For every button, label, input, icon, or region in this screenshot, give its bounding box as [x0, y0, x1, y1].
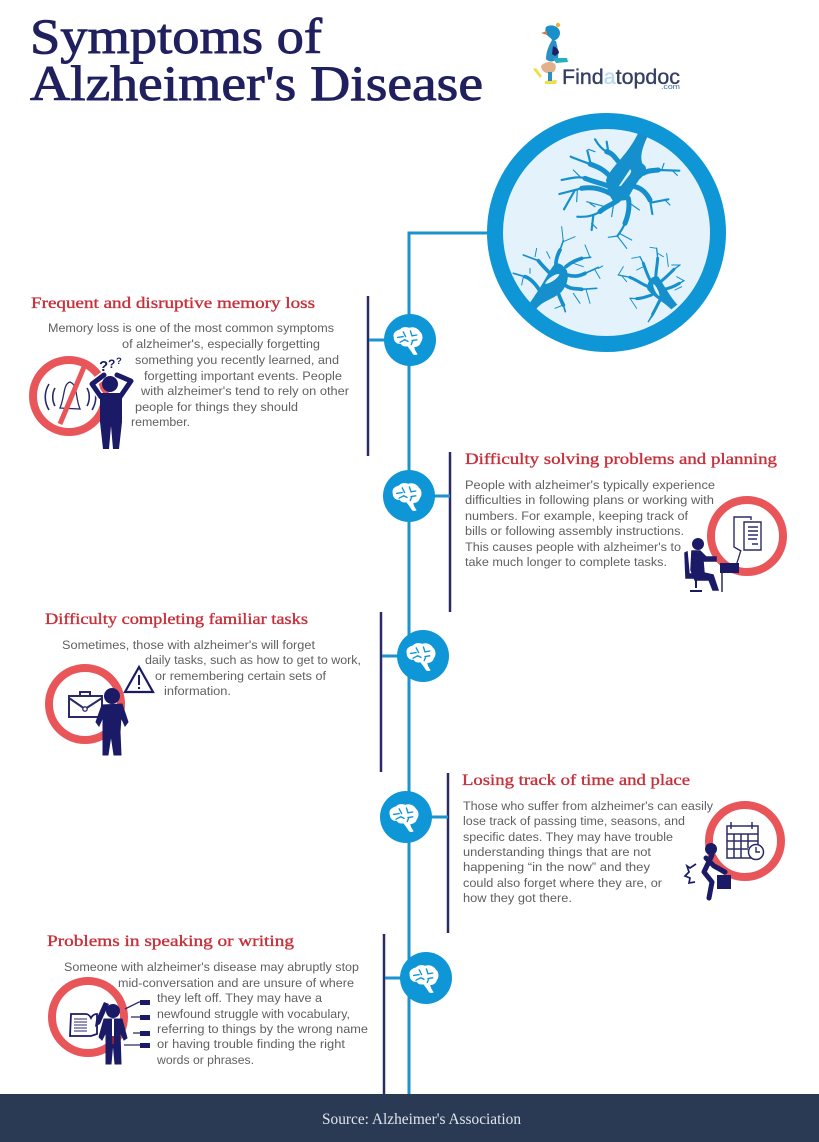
icon: confused person with muted bell: ?: [108, 357, 115, 371]
footer: source bar: [0, 1094, 819, 1142]
body text: how they got there.: [463, 891, 572, 905]
body text: Memory loss is one of the most common symptoms: [48, 321, 334, 335]
body text: forgetting important events. People: [144, 369, 342, 383]
icon: confused person with muted bell: ?: [99, 358, 108, 375]
body text: numbers. For example, keeping track of: [465, 509, 689, 523]
body text: bills or following assembly instructions.: [465, 524, 684, 538]
neuron 3: [618, 247, 684, 322]
body text: referring to things by the wrong name: [157, 1022, 368, 1036]
body text: [62, 638, 361, 698]
heading: Problems in speaking or writing: [47, 932, 294, 950]
body text: specific dates. They may have trouble: [463, 830, 673, 844]
section 4: time and place: [380, 771, 781, 933]
connector: [385, 976, 408, 980]
body text: take much longer to complete tasks.: [465, 555, 667, 569]
section 5: speaking or writing: [47, 932, 452, 1094]
section 1: memory loss: [31, 294, 436, 456]
heading: Difficulty solving problems and planning: [465, 450, 777, 468]
body text: people for things they should: [135, 400, 298, 414]
connector: [382, 654, 405, 658]
icon: brain badge: [380, 791, 432, 843]
body text: Those who suffer from alzheimer's can easily: [463, 799, 714, 813]
neuron circle illustration: [495, 121, 718, 344]
section rule: [447, 773, 449, 933]
body text: understanding things that are not: [463, 845, 652, 859]
timeline spine: [409, 233, 487, 1094]
body text: or remembering certain sets of: [155, 669, 327, 683]
logo wordmark: Findatopdoc: [562, 66, 680, 89]
body text: [64, 960, 368, 1067]
body text: This causes people with alzheimer's to: [465, 540, 681, 554]
body text: something you recently learned, and: [135, 353, 339, 367]
body text: remember.: [131, 415, 190, 429]
body text: they left off. They may have a: [157, 991, 322, 1005]
connector: [369, 338, 390, 342]
icon: brain badge: [397, 630, 449, 682]
section rule: [380, 612, 382, 772]
body text: daily tasks, such as how to get to work,: [145, 653, 361, 667]
body text: words or phrases.: [156, 1053, 254, 1067]
icon: brain badge: [400, 952, 452, 1004]
icon: brain badge: [384, 314, 436, 366]
body text: People with alzheimer's typically experience: [465, 478, 715, 492]
body text: [465, 478, 715, 569]
icon: duck mascot: [533, 23, 568, 84]
body text: information.: [164, 684, 231, 698]
title: [30, 8, 483, 111]
icon: confused person with muted bell: [33, 356, 131, 449]
icon: person with briefcase and warning: [49, 667, 153, 755]
icon: person at desk with document: [685, 500, 783, 592]
icon: person with calendar and clock: [685, 805, 781, 898]
title: Alzheimer's Disease: [30, 55, 483, 111]
body text: difficulties in following plans or working with: [465, 493, 714, 507]
icon: confused person with muted bell: ?: [116, 356, 122, 367]
section rule: [367, 296, 369, 456]
section 3: familiar tasks: [45, 610, 449, 772]
body text: happening “in the now” and they: [463, 860, 651, 874]
neuron 1: [559, 133, 679, 248]
body text: lose track of passing time, seasons, and: [463, 814, 685, 828]
body text: with alzheimer's tend to rely on other: [140, 384, 349, 398]
logo: Findatopdoc: [533, 23, 680, 91]
body text: newfound struggle with vocabulary,: [157, 1007, 350, 1021]
icon: person with book and speech lines: [52, 981, 150, 1064]
body text: of alzheimer's, especially forgetting: [122, 337, 320, 351]
body text: Sometimes, those with alzheimer's will forget: [62, 638, 316, 652]
body text: Someone with alzheimer's disease may abruptly stop: [64, 960, 359, 974]
body text: [48, 321, 349, 429]
section 2: solving problems: [383, 450, 783, 612]
body text: could also forget where they are, or: [463, 876, 662, 890]
body text: [463, 799, 714, 905]
neuron 2: [513, 227, 603, 312]
connector: [428, 816, 448, 818]
title: Symptoms of: [30, 8, 322, 64]
body text: mid-conversation and are unsure of where: [118, 976, 354, 990]
section rule: [449, 452, 451, 612]
heading: Difficulty completing familiar tasks: [45, 610, 308, 628]
connector: [430, 494, 450, 498]
heading: Losing track of time and place: [462, 771, 690, 789]
source text: Source: Alzheimer's Association: [322, 1111, 521, 1128]
logo .com: .com: [661, 82, 680, 91]
section rule: [383, 934, 385, 1094]
heading: Frequent and disruptive memory loss: [31, 294, 315, 312]
body text: or having trouble finding the right: [157, 1037, 346, 1051]
icon: brain badge: [383, 470, 435, 522]
